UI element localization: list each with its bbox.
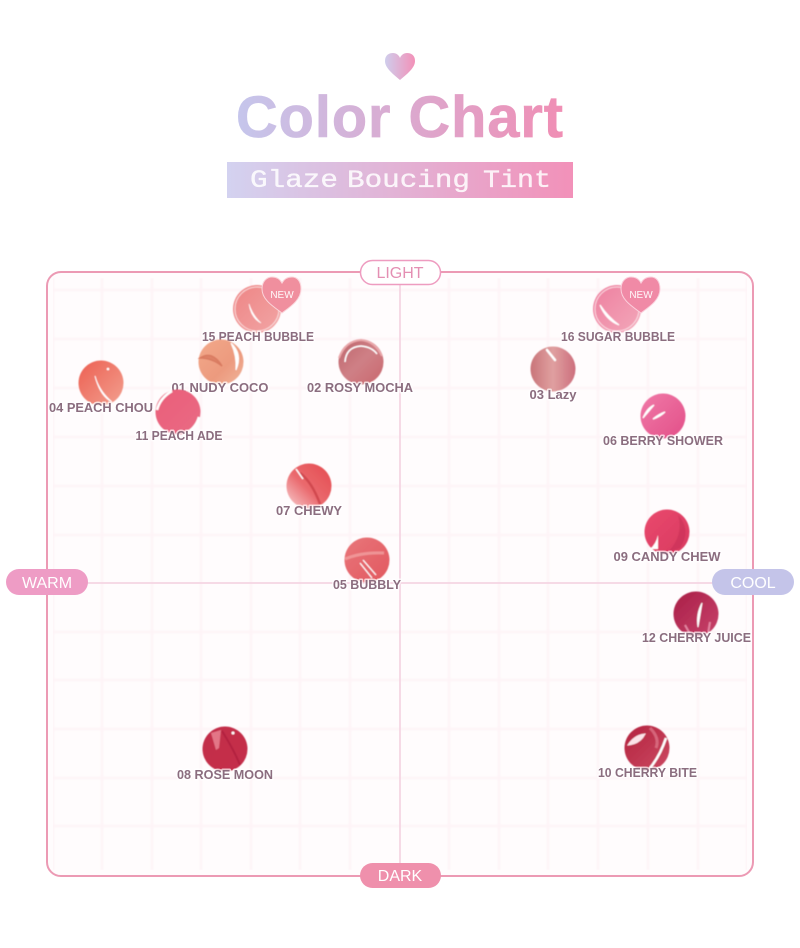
axis label: dark [360, 863, 441, 888]
title: Color Chart [236, 85, 564, 150]
label: 03 lazy: 03 Lazy [530, 388, 577, 402]
swatch: 07 chewy [286, 464, 332, 508]
label: 05 bubbly: 05 BUBBLY [333, 578, 402, 592]
label: 01 nudy coco: 01 NUDY COCO [172, 381, 269, 395]
label: 10 cherry bite: 10 CHERRY BITE [598, 766, 697, 780]
axis label: warm [6, 569, 88, 595]
label: 08 rose moon: 08 ROSE MOON [177, 768, 273, 782]
swatch: 03 lazy [530, 346, 576, 392]
swatch: 09 candy chew [644, 510, 690, 554]
swatch: 01 nudy coco [198, 340, 244, 384]
subtitle banner [227, 162, 573, 198]
panel: color chart grid [47, 272, 753, 876]
axis label: light [360, 260, 440, 284]
subtitle banner: Glaze [250, 166, 338, 195]
axis label: dark: DARK [378, 868, 423, 885]
label: 06 berry shower: 06 BERRY SHOWER [603, 434, 723, 448]
label: 07 chewy: 07 CHEWY [276, 504, 343, 518]
label: 15 peach bubble: 15 PEACH BUBBLE [202, 330, 314, 344]
axis label: cool: COOL [730, 575, 776, 592]
label: 16 sugar bubble: 16 SUGAR BUBBLE [561, 330, 675, 344]
label: 11 peach ade: 11 PEACH ADE [136, 429, 222, 443]
icon: new heart 16: NEW [629, 290, 653, 301]
label: 09 candy chew: 09 CANDY CHEW [614, 550, 721, 564]
axis label: light: LIGHT [376, 265, 424, 282]
subtitle banner: Boucing [347, 166, 470, 195]
label: 12 cherry juice: 12 CHERRY JUICE [642, 631, 751, 645]
swatch: 02 rosy mocha [338, 340, 384, 384]
axis label: warm: WARM [22, 575, 72, 592]
icon: heart [385, 53, 415, 80]
swatch: 06 berry shower [640, 394, 686, 438]
swatch: 04 peach chou [78, 360, 124, 406]
swatch: 11 peach ade [156, 390, 200, 434]
icon: new heart 15 [262, 277, 301, 313]
swatch: 16 sugar bubble [593, 285, 641, 333]
swatch: 15 peach bubble [233, 285, 281, 333]
swatch: 08 rose moon [202, 726, 248, 772]
label: 04 peach chou: 04 PEACH CHOU [49, 401, 153, 415]
icon: new heart 15: NEW [270, 290, 294, 301]
swatch: 12 cherry juice [674, 592, 718, 636]
label: 02 rosy mocha: 02 ROSY MOCHA [307, 381, 413, 395]
axis label: cool [712, 569, 794, 595]
icon: new heart 16 [621, 277, 660, 313]
swatch: 05 bubbly [344, 538, 390, 582]
subtitle banner: Tint [483, 166, 551, 195]
swatch: 10 cherry bite [624, 726, 670, 770]
